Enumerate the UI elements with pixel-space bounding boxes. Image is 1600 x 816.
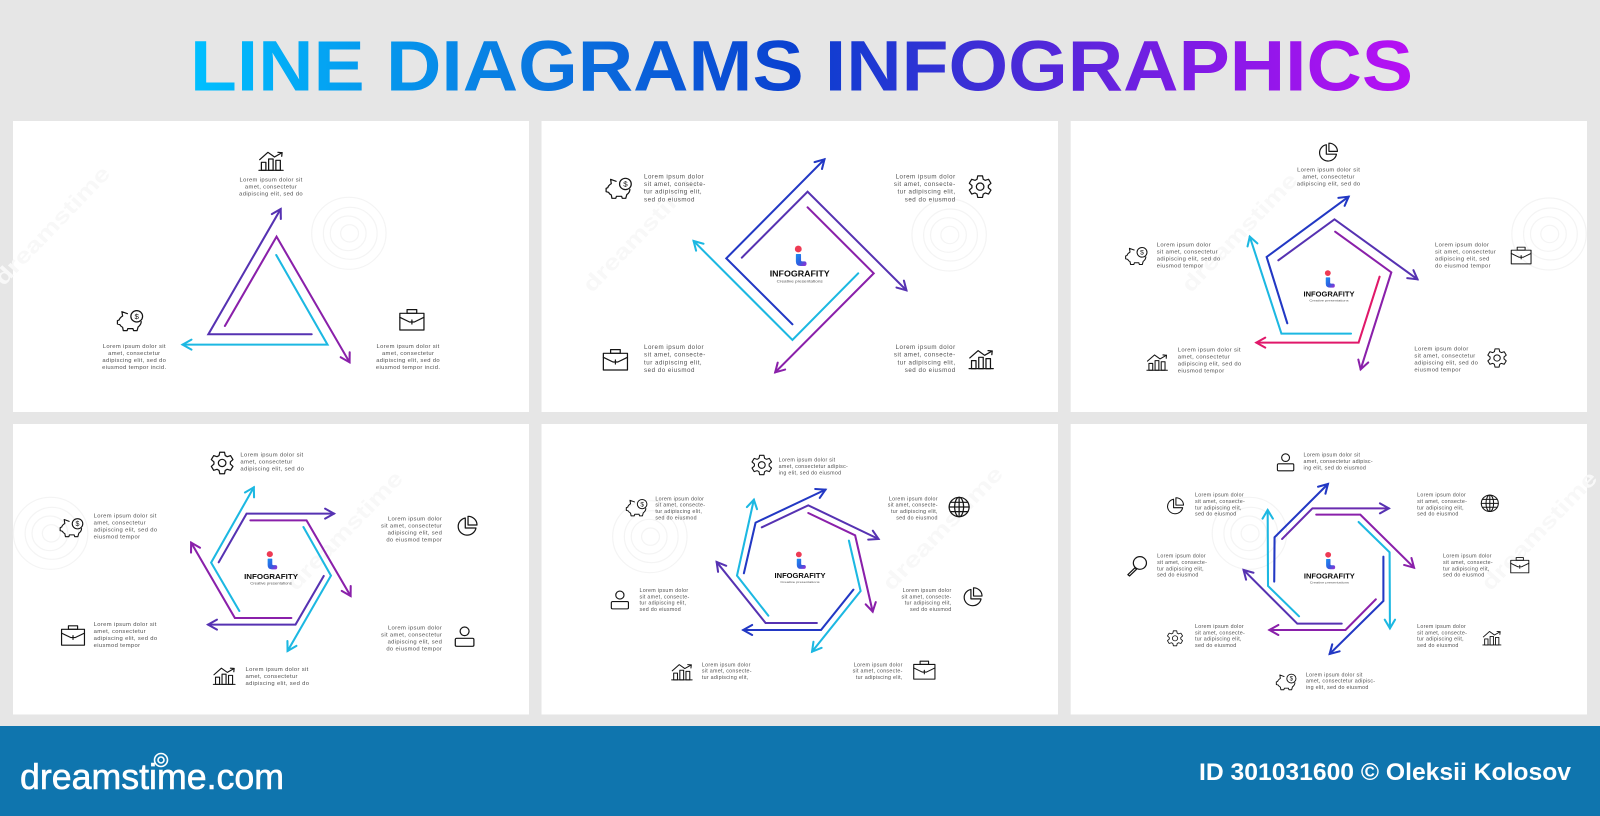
icon: pie chart [458,516,477,535]
arrow 1 [208,209,312,334]
text: right: eiusmod tempor incid. [376,365,440,371]
text: lower left: sit amet, consecte- [1195,630,1245,636]
text: upper left: sit amet, consecte- [1195,499,1245,505]
text: lower left: adipiscing elit, sed do [94,636,157,642]
text: lower left: adipiscing elit, sed do [1178,362,1242,368]
arrow 2 [219,514,334,562]
watermark text: dreamstime [281,466,408,595]
text: right: sit amet, consectetur [1435,249,1496,255]
icon: person [455,627,474,646]
text: upper right: sed do eiusmod [1417,512,1459,518]
text: right: Lorem ipsum dolor [903,588,952,594]
text: top left: sed do eiusmod [644,196,695,203]
arrow 3 [808,513,873,612]
icon: globe [949,497,969,517]
arrow 2 [1282,508,1389,539]
text: left: adipiscing elit, sed do [1157,256,1221,262]
text: right: sed do eiusmod [1443,573,1485,579]
icon: piggy bank [1276,674,1296,690]
text: top: amet, consectetur [1302,174,1355,180]
text: bottom: adipiscing elit, sed do [246,681,309,687]
watermark spiral [1212,497,1287,569]
text: upper right: adipiscing elit, sed [388,530,442,536]
arrow 5 [743,590,853,630]
icon: gear [969,176,991,197]
text: upper right: tur adipiscing elit, [1417,505,1464,511]
text: top: Lorem ipsum dolor sit [240,453,304,459]
arrow 6 [1269,599,1376,630]
icon: briefcase [62,626,84,645]
arrow 7 [737,500,768,616]
text: lower right: eiusmod tempor [1414,367,1461,373]
text: lower left: sed do eiusmod [1195,643,1237,649]
text: lower right: do eiusmod tempor [386,646,442,652]
text: right: tur adipiscing elit, [905,601,952,607]
icon: pie chart [1320,143,1337,161]
text: top right: sit amet, consecte- [894,181,956,188]
text: top: amet, consectetur adipisc- [1303,459,1373,465]
icon: piggy bank [606,178,631,198]
icon: gear [1488,349,1506,367]
panel: pentagon diagram [1071,121,1587,412]
text: lower right: adipiscing elit, sed [388,639,442,645]
text: lower left: eiusmod tempor [94,643,140,649]
footer bar [0,726,1600,816]
icon: piggy bank [60,519,83,537]
icon: briefcase [603,350,627,370]
text: lower right: tur adipiscing elit, [1417,637,1464,643]
text: upper left: tur adipiscing elit, [655,509,702,515]
icon: globe [1481,495,1498,512]
arrow 8 [1268,510,1299,616]
icon: chart [213,668,235,684]
icon: gear [752,455,772,475]
arrow 6 [191,543,291,618]
text: top right: sed do eiusmod [905,196,956,203]
text: upper right: sed do eiusmod [896,515,938,521]
text: upper right: Lorem ipsum dolor [388,516,442,522]
text: lower right: adipiscing elit, sed do [1414,360,1478,366]
text: upper right: sit amet, consectetur [381,523,442,529]
logo [1304,270,1355,303]
arrow 4 [288,527,331,651]
text: right: sit amet, consecte- [902,594,952,600]
text: right: Lorem ipsum dolor [1435,242,1489,248]
arrow 7 [1244,570,1342,624]
arrow 5 [208,576,324,625]
text: bottom right: sit amet, consecte- [894,352,956,359]
text: bottom left: Lorem ipsum dolor [644,344,704,351]
text: lower left: Lorem ipsum dolor sit [94,622,157,628]
icon: chart [1483,631,1501,645]
text: upper left: sed do eiusmod [655,515,697,521]
watermark text: dreamstime [1176,168,1303,297]
title: LINE DIAGRAMS INFOGRAPHICS [190,28,1413,106]
text: top: amet, consectetur adipisc- [779,464,848,470]
text: lower left: tur adipiscing elit, [1195,637,1242,643]
arrow 2 [225,237,350,362]
icon: pie chart [964,588,982,606]
text: bottom: Lorem ipsum dolor sit [246,667,309,673]
icon: person [611,591,628,609]
icon: gear [211,452,233,474]
icon: gear [1167,631,1183,646]
arrow 1 [744,490,825,573]
text: right: do eiusmod tempor [1435,263,1491,269]
text: lower right: Lorem ipsum dolor [388,625,442,631]
arrow 4 [1256,277,1380,343]
text: upper right: sit amet, consecte- [1417,499,1467,505]
text: bottom left: Lorem ipsum dolor [702,662,751,668]
text: lower right: sit amet, consectetur [381,632,442,638]
watermark text: dreamstime [577,168,704,297]
text: right: sit amet, consecte- [1443,560,1493,566]
text: left: eiusmod tempor [1157,263,1204,269]
text: top: amet, consectetur [240,460,293,466]
text: upper left: Lorem ipsum dolor [655,496,704,502]
watermark text: dreamstime [1476,466,1600,595]
text: left: sit amet, consecte- [1157,560,1207,566]
text: upper left: adipiscing elit, sed do [94,527,157,533]
text: left: sit amet, consecte- [640,594,690,600]
icon: pie chart [1168,498,1184,514]
arrow 6 [717,562,817,623]
logo [1304,552,1355,584]
text: left: amet, consectetur [108,351,160,357]
icon: briefcase [1511,558,1529,573]
text: bottom left: sit amet, consecte- [644,352,706,359]
arrow 4 [812,541,861,652]
text: lower right: sit amet, consectetur [1414,353,1476,359]
text: lower left: eiusmod tempor [1178,369,1225,375]
arrow 3 [183,255,328,345]
icon: chart [1147,355,1167,370]
text: top: Lorem ipsum dolor sit [1297,167,1360,173]
panel: hexagon diagram [13,424,529,714]
text: top left: sit amet, consecte- [644,181,706,188]
text: right: tur adipiscing elit, [1443,566,1490,572]
text: top left: tur adipiscing elit, [644,189,702,196]
footer logo text: dreamstime.com [20,756,284,797]
text: top left: Lorem ipsum dolor [644,173,704,180]
logo [775,552,826,584]
arrow 2 [1278,219,1417,279]
panel: octagon diagram [1071,424,1600,714]
text: right: sed do eiusmod [910,607,952,613]
text: lower right: Lorem ipsum dolor [1414,346,1469,352]
arrow 2 [762,505,879,539]
arrow 2 [742,192,906,290]
text: bottom: amet, consectetur adipisc- [1306,679,1375,685]
text: top right: Lorem ipsum dolor [896,173,956,180]
text: right: Lorem ipsum dolor sit [377,344,440,350]
text: upper right: sit amet, consecte- [888,503,938,509]
logo [244,551,298,585]
icon: piggy bank [626,499,647,516]
text: right: adipiscing elit, sed [1435,256,1490,262]
text: bottom: ing elit, sed do eiusmod [1306,685,1369,691]
text: bottom left: tur adipiscing elit, [644,359,702,366]
text: upper left: sit amet, consecte- [655,503,705,509]
icon: chart [969,351,993,369]
panel: square diagram [542,121,1058,412]
text: upper right: tur adipiscing elit, [891,509,938,515]
text: top: ing elit, sed do eiusmod [1303,465,1366,471]
text: top: amet, consectetur [245,184,297,190]
text: left: Lorem ipsum dolor sit [103,344,166,350]
arrow 1 [726,159,824,324]
text: bottom right: sit amet, consecte- [853,669,903,675]
text: left: sit amet, consectetur [1157,249,1218,255]
text: left: sed do eiusmod [1157,573,1199,579]
text: bottom right: Lorem ipsum dolor [854,662,903,668]
text: upper right: do eiusmod tempor [386,537,442,543]
text: top: Lorem ipsum dolor sit [1303,453,1361,459]
icon: person [1277,454,1294,471]
text: bottom left: sed do eiusmod [644,367,695,374]
arrow 3 [1335,232,1391,369]
arrow 1 [211,487,254,611]
text: bottom right: tur adipiscing elit, [897,359,956,366]
watermark spiral [912,199,986,271]
icon: briefcase [1511,247,1531,264]
arrow 4 [694,241,858,340]
panel: heptagon diagram [542,424,1058,714]
text: top right: tur adipiscing elit, [897,189,956,196]
text: upper right: Lorem ipsum dolor [889,496,938,502]
text: upper left: amet, consectetur [94,520,146,526]
icon: piggy bank [1126,247,1147,264]
text: upper right: Lorem ipsum dolor [1417,493,1466,499]
text: bottom right: sed do eiusmod [905,367,956,374]
text: bottom: amet, consectetur [246,674,298,680]
icon: chart [672,665,692,680]
text: left: Lorem ipsum dolor [1157,242,1211,248]
text: lower left: Lorem ipsum dolor [1195,624,1244,630]
text: top: Lorem ipsum dolor sit [239,177,303,183]
text: top: adipiscing elit, sed do [239,191,303,197]
text: left: Lorem ipsum dolor [1157,554,1206,560]
text: bottom left: tur adipiscing elit, [702,675,749,681]
arrow 4 [1359,522,1390,628]
text: bottom right: Lorem ipsum dolor [896,344,956,351]
text: right: adipiscing elit, sed do [376,358,440,364]
text: top: adipiscing elit, sed do [240,467,304,473]
arrow 3 [250,520,351,596]
text: left: adipiscing elit, sed do [102,358,166,364]
text: bottom left: sit amet, consecte- [702,669,752,675]
watermark spiral [613,501,687,573]
text: upper left: Lorem ipsum dolor sit [94,513,157,519]
text: bottom: Lorem ipsum dolor sit [1306,672,1363,678]
text: right: Lorem ipsum dolor [1443,554,1492,560]
icon: briefcase [914,661,935,679]
arrow 1 [1267,197,1349,323]
text: right: amet, consectetur [382,351,434,357]
text: left: eiusmod tempor incid. [102,365,167,371]
text: left: tur adipiscing elit, [1157,566,1204,572]
arrow 3 [775,207,874,372]
text: lower left: amet, consectetur [94,629,146,635]
icon: magnifier [1128,557,1146,576]
text: lower left: amet, consectetur [1178,355,1230,361]
arrow 5 [1250,237,1351,334]
panel: triangle diagram [0,121,529,412]
text: left: sed do eiusmod [640,607,681,613]
text: lower left: Lorem ipsum dolor sit [1178,348,1241,354]
text: upper left: Lorem ipsum dolor [1195,493,1244,499]
text: top: Lorem ipsum dolor sit [779,458,836,464]
watermark spiral [1512,198,1586,270]
icon: piggy bank [117,311,143,331]
text: left: tur adipiscing elit, [640,601,686,607]
text: lower right: sit amet, consecte- [1417,630,1467,636]
text: top: adipiscing elit, sed do [1297,181,1361,187]
text: top: ing elit, sed do eiusmod [779,470,841,476]
watermark text: dreamstime [877,461,1008,595]
arrow 3 [1316,515,1414,568]
watermark spiral [13,497,88,569]
text: upper left: eiusmod tempor [94,534,140,540]
text: upper left: tur adipiscing elit, [1195,505,1242,511]
watermark spiral [312,197,386,269]
text: lower right: Lorem ipsum dolor [1417,624,1466,630]
arrow 5 [1330,557,1383,654]
logo [770,246,830,284]
icon: chart [259,152,283,170]
text: left: Lorem ipsum dolor [640,588,688,594]
text: lower right: sed do eiusmod [1417,643,1459,649]
icon: briefcase [400,310,424,330]
text: bottom right: tur adipiscing elit, [856,675,903,681]
footer credit: ID 301031600 © Oleksii Kolosov [1199,759,1572,786]
text: upper left: sed do eiusmod [1195,512,1237,518]
footer logo spiral [154,754,168,766]
arrow 1 [1274,484,1328,582]
